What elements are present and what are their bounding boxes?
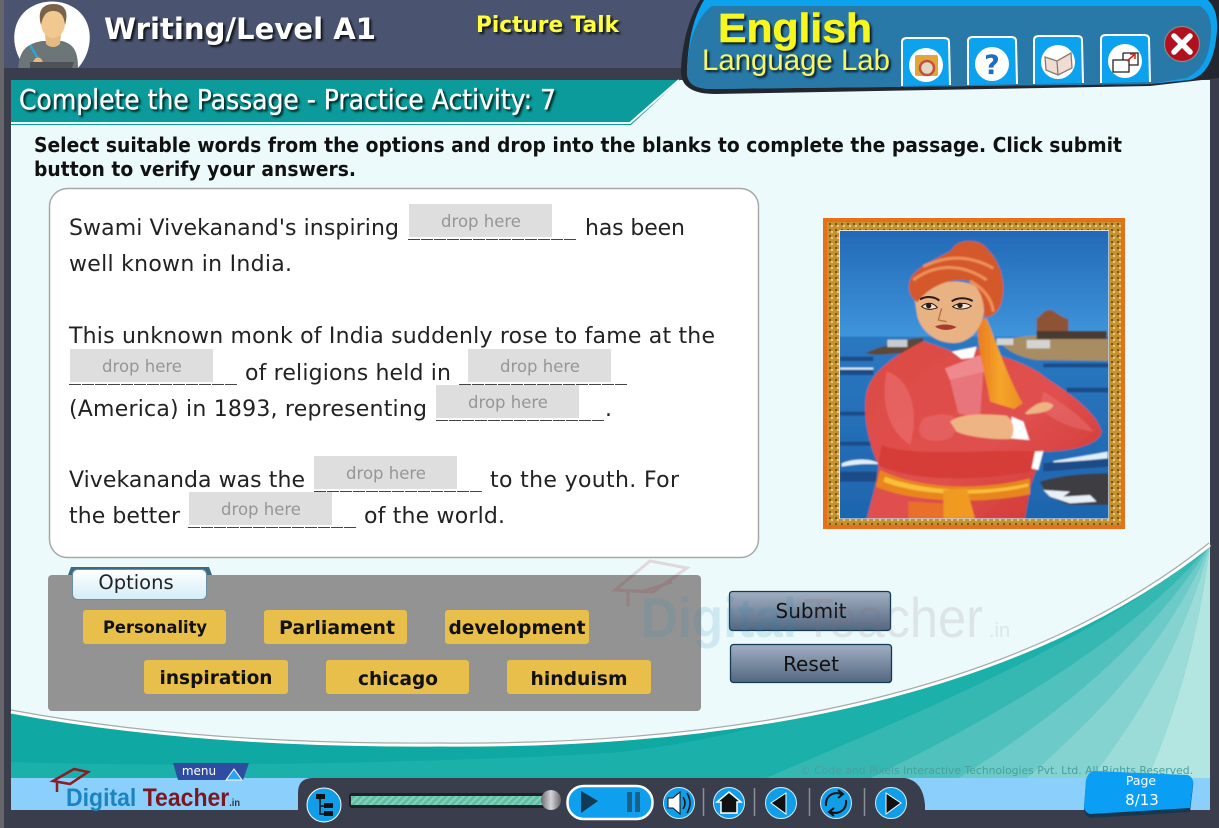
white collar: [952, 347, 977, 359]
avatar neck: [45, 34, 61, 47]
lab panel shadow: [681, 0, 1219, 94]
reset body: [730, 644, 892, 682]
island building left: [887, 340, 907, 347]
home icon: [717, 792, 741, 813]
heading: writing level: Writing/Level A1: [104, 12, 376, 46]
avatar hand: [34, 58, 42, 66]
button: reset: [730, 644, 892, 682]
instruction line 1: Select suitable words from the options and drop into the blanks to complete the passage. Click submit: [34, 133, 1122, 157]
previous circle: [766, 788, 796, 818]
robe placket: [950, 372, 983, 418]
folder icon: [915, 55, 938, 76]
drop zone 5: [314, 456, 457, 489]
button: tree menu: [307, 788, 341, 822]
windows icon: [1113, 53, 1138, 72]
copyright notice: © Code and Pixels Interactive Technologies Pvt. Ltd. All Rights Reserved.: [800, 765, 1193, 777]
button: next: [876, 788, 906, 818]
option: inspiration: [144, 660, 288, 694]
progress track: [349, 793, 546, 808]
button: previous: [766, 788, 796, 818]
media controls: [298, 778, 925, 828]
drop zone 4: drop here: [468, 393, 548, 412]
banner shape: [11, 80, 680, 125]
tree icon: [316, 794, 333, 816]
drop zone 3: [468, 349, 611, 382]
progress knob: [541, 790, 561, 810]
temple base: [1037, 331, 1107, 339]
left eye: [922, 303, 937, 309]
avatar pen: [30, 45, 40, 62]
turban folds: [913, 258, 993, 312]
foam on rocks: [1043, 490, 1097, 503]
pause icon: [627, 792, 640, 812]
play icon: [581, 791, 598, 813]
instruction line 2: button to verify your answers.: [34, 157, 356, 181]
lab panel rim: [687, 0, 1217, 89]
island right: [1000, 335, 1108, 361]
nose: [938, 308, 947, 322]
watermark teacher: Teacher: [803, 586, 983, 649]
panel: passage: [50, 188, 758, 558]
options tab back: [68, 567, 212, 575]
portrait ornamental frame: [827, 222, 1121, 525]
option: Personality: Personality: [103, 618, 207, 637]
teal activity banner: [11, 80, 680, 125]
logo cap: [53, 769, 88, 792]
option: development: [445, 610, 589, 644]
watermark cap: [615, 561, 687, 606]
next circle: [876, 788, 906, 818]
passage line 6 start: Vivekananda was the: [69, 468, 305, 493]
portrait: Swami Vivekananda: [823, 218, 1125, 529]
drop zone 5: drop here: [346, 464, 426, 483]
lab title language lab: Language Lab: [702, 44, 890, 77]
wave edge shadow: [11, 543, 1209, 743]
clock icon: [920, 61, 934, 75]
portrait outer frame: [823, 218, 1125, 529]
tab circle: [1108, 44, 1142, 78]
control separators: [704, 788, 864, 816]
passage card: [50, 188, 758, 558]
left brow: [920, 297, 939, 301]
option: development: development: [448, 617, 586, 639]
home circle: [714, 788, 744, 818]
menu tab: [173, 763, 249, 780]
audio circle: [664, 788, 694, 818]
passage line 4: of religions held in: [245, 361, 451, 386]
portrait painting: [838, 228, 1110, 520]
button: audio: [664, 788, 694, 818]
lab title english: English: [718, 5, 872, 51]
sleeve cuff: [1010, 417, 1043, 470]
tab body: [1101, 35, 1150, 83]
hand rear: [1025, 402, 1053, 414]
refresh circle: [820, 788, 852, 818]
option: hinduism: [507, 660, 651, 694]
page badge shadow: [1084, 774, 1193, 818]
book icon: [1045, 53, 1072, 75]
sea: [838, 337, 1110, 520]
drop zone 2: [70, 349, 213, 382]
island buildings: [997, 338, 1050, 348]
passage line 5 end: .: [605, 397, 612, 422]
tree lines: [320, 799, 324, 814]
heading: picture talk: Picture Talk: [476, 13, 620, 38]
tab body: [1034, 36, 1083, 84]
audio icon: [668, 792, 680, 814]
pill: [568, 786, 652, 819]
bottom wave decoration: [11, 540, 1210, 790]
option: inspiration: inspiration: [160, 667, 272, 689]
passage line 1 end: has been: [585, 216, 685, 241]
passage line 5: (America) in 1893, representing: [69, 397, 427, 422]
drop zone 2: drop here: [102, 357, 182, 376]
blank underlines: [69, 240, 627, 528]
lab panel body: [687, 6, 1211, 89]
avatar hair: [40, 4, 67, 25]
left edge strip: [0, 0, 4, 828]
submit label: Submit: [776, 599, 847, 623]
previous icon: [771, 793, 786, 814]
page badge: [1084, 771, 1193, 814]
drop zone 4: [436, 385, 579, 418]
panel: options: [48, 567, 701, 711]
lower robe shade: [908, 502, 943, 518]
lips: [935, 325, 957, 330]
drop zone 1: [409, 204, 552, 237]
sash highlight: [883, 477, 1028, 494]
close circle: [1164, 26, 1200, 62]
robe collar: [945, 355, 987, 380]
right brow: [952, 298, 973, 301]
sea foam: [840, 368, 1108, 467]
button: home: [714, 788, 744, 818]
tab: timer folder: [902, 38, 950, 86]
option: chicago: [326, 660, 469, 694]
watermark digital: Digital: [641, 586, 797, 649]
drop zone 6: [189, 492, 332, 525]
tab: book: [1034, 36, 1083, 84]
menu shape: [173, 763, 249, 780]
question mark: ?: [984, 50, 1000, 81]
option: chicago: chicago: [358, 668, 438, 690]
footer strip: [11, 778, 1210, 810]
banner edge: [11, 80, 679, 123]
passage line 2: well known in India.: [69, 252, 292, 277]
folded arm shading: [878, 445, 1037, 478]
torso: [865, 341, 1102, 518]
logo: Digital Teacher: [53, 769, 240, 812]
arrow icon: [1127, 54, 1135, 61]
left iris: [926, 303, 931, 308]
page number: 8/13: [1125, 791, 1159, 809]
header bar: [4, 0, 1219, 68]
banner title: Complete the Passage - Practice Activity: 7: [19, 84, 556, 116]
avatar desk: [30, 62, 74, 68]
button: refresh: [820, 788, 852, 818]
portrait inner border: [839, 230, 1109, 519]
tab body: [968, 37, 1017, 85]
hand front: [950, 414, 1013, 439]
temple: [1037, 310, 1068, 334]
wave edge highlight: [11, 545, 1210, 745]
option: Personality: [83, 610, 226, 644]
close button: [1164, 26, 1200, 62]
drop zone 1: drop here: [441, 212, 521, 231]
passage line 3: This unknown monk of India suddenly rose to fame at the: [68, 324, 715, 349]
reset label: Reset: [783, 652, 839, 676]
sea waves: [840, 357, 1108, 482]
options tab: [72, 570, 206, 600]
control bar: [298, 778, 925, 828]
robe highlight: [885, 372, 914, 445]
island left: [865, 338, 923, 355]
drop zone 6: drop here: [221, 500, 301, 519]
tab: help: [968, 37, 1017, 85]
right eye: [953, 303, 971, 309]
instructions: [34, 133, 1122, 181]
tab circle: [909, 48, 943, 82]
submit body: [730, 592, 890, 630]
rocks foreground: [1040, 473, 1108, 505]
passage line 7 end: of the world.: [364, 504, 505, 529]
avatar torso: [18, 41, 78, 68]
menu arrow: [226, 769, 242, 780]
page indicator: [1084, 771, 1193, 818]
play pause pill: [568, 786, 652, 819]
tab circle: [975, 47, 1009, 81]
options box: [48, 575, 701, 711]
avatar oval: [14, 2, 90, 68]
sash knot: [943, 488, 975, 518]
tab: windows: [1101, 35, 1150, 83]
head: [915, 282, 985, 343]
option: Parliament: Parliament: [279, 617, 395, 639]
tab body: [902, 38, 950, 86]
option: Parliament: [264, 610, 407, 644]
tree circle: [307, 788, 341, 822]
sky: [838, 228, 1110, 340]
avatar head: [41, 8, 65, 38]
icon: student avatar: [14, 2, 90, 68]
next icon: [886, 793, 901, 814]
right iris: [957, 303, 963, 308]
scarf: [978, 318, 1023, 409]
panel: English Language Lab: [681, 0, 1219, 94]
watermark suffix: .in: [989, 620, 1010, 642]
close cross: [1174, 36, 1190, 52]
turban: [909, 241, 1003, 317]
watermark logo: [615, 561, 1010, 649]
passage line 6 end: to the youth. For: [490, 468, 680, 493]
options tab label: Options: [98, 571, 174, 594]
tab circle: [1041, 45, 1075, 79]
drop zone 3: drop here: [500, 357, 580, 376]
passage line 1 start: Swami Vivekanand's inspiring: [69, 216, 399, 241]
robe highlight arm: [919, 392, 1093, 441]
logo text: Digital Teacher.in: [66, 784, 240, 812]
menu label: menu: [182, 764, 216, 778]
refresh icon: [826, 790, 846, 816]
passage line 7 start: the better: [69, 504, 181, 529]
button: submit: [730, 592, 890, 630]
audio waves: [683, 793, 690, 813]
page label: Page: [1126, 773, 1156, 788]
sash: [876, 470, 1030, 501]
progress fill: [351, 796, 544, 805]
option: hinduism: hinduism: [530, 668, 628, 690]
